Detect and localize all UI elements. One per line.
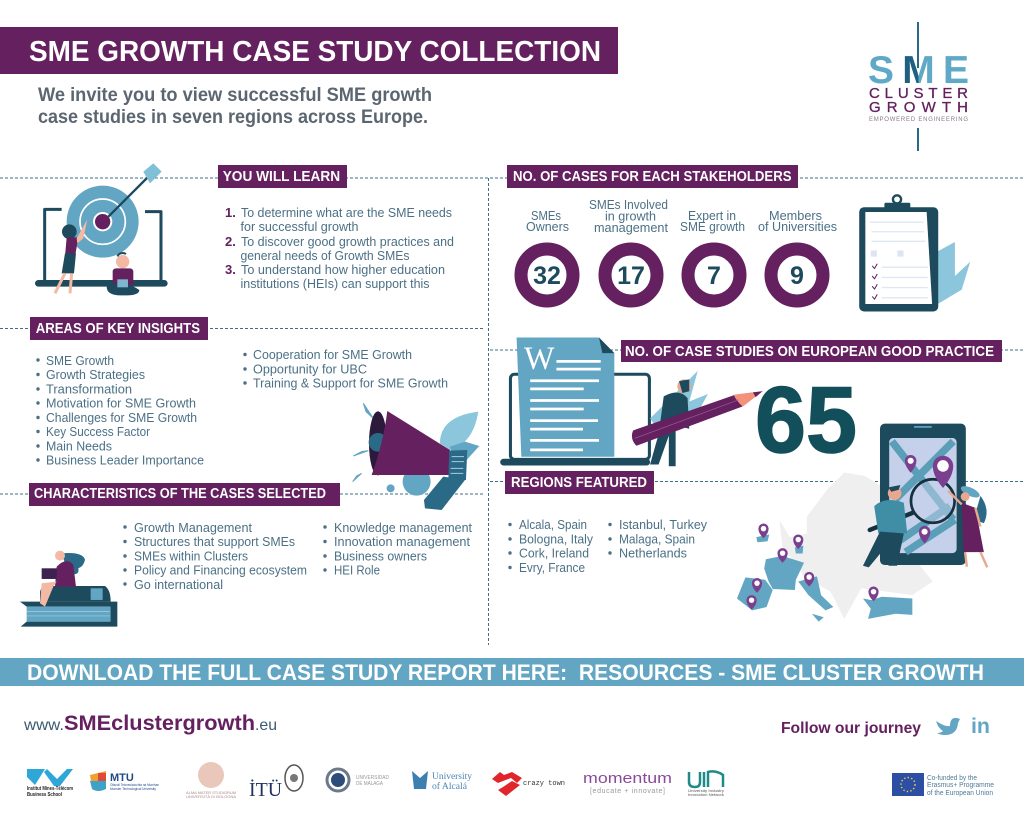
list: key insights column one: Transformation bbox=[46, 382, 132, 396]
logo: momentum bbox=[583, 770, 672, 795]
logo: MTU: MTU bbox=[110, 772, 134, 784]
subtitle bbox=[38, 85, 432, 128]
learning list: To discover good growth practices and bbox=[241, 234, 454, 249]
stakeholder labels: SMEs Involved bbox=[589, 197, 668, 212]
logo: University of Alcala bbox=[412, 771, 472, 792]
list: key insights column one: Business Leader Importance bbox=[46, 452, 204, 468]
stakeholder labels: of Universities bbox=[758, 219, 837, 234]
logo: Universidad de Malaga: UNIVERSIDAD bbox=[356, 775, 389, 781]
logo: ITU bbox=[249, 765, 303, 801]
stakeholder labels: SME growth bbox=[680, 219, 745, 234]
stakeholder labels: Expert in bbox=[688, 208, 736, 223]
learning list: institutions (HEIs) can support this bbox=[240, 276, 430, 291]
stakeholder number circles: 32 bbox=[533, 262, 561, 290]
logo: UIIN: Innovation Network bbox=[688, 793, 724, 797]
logo: SME Cluster Growth: SME bbox=[868, 49, 969, 92]
stakeholder labels bbox=[526, 197, 837, 235]
list: key insights column two: Opportunity for UBC bbox=[253, 362, 367, 376]
list: key insights column two bbox=[243, 347, 448, 390]
logo: SME Cluster Growth: EMPOWERED ENGINEERING bbox=[869, 117, 968, 123]
download banner: DOWNLOAD THE FULL CASE STUDY REPORT HERE: RESOURCES - SME CLUSTER GROWTH bbox=[27, 660, 984, 685]
list: case characteristics column one: Policy and Financing ecosystem bbox=[134, 562, 307, 578]
heading: areas of key insights: AREAS OF KEY INSIGHTS bbox=[36, 321, 200, 337]
website address: SMEclustergrowth bbox=[64, 712, 255, 735]
list: regions column two: Netherlands bbox=[619, 546, 687, 560]
icon: linkedin: in bbox=[971, 715, 990, 738]
logo: Universidad de Malaga bbox=[327, 769, 389, 791]
list: case characteristics column one: Growth Management bbox=[134, 520, 252, 535]
logo: SME Cluster Growth: GROWTH bbox=[869, 99, 968, 116]
list: key insights column one: Key Success Factor bbox=[46, 424, 151, 439]
illustration: tablet with magnifier and two people bbox=[863, 424, 987, 567]
logo: Institut Mines-Télécom Business School bbox=[27, 769, 73, 798]
logo: University of Alcala: of Alcalá bbox=[432, 781, 468, 792]
illustration: clipboard bbox=[859, 195, 970, 311]
heading: you will learn: YOU WILL LEARN bbox=[223, 169, 340, 185]
stakeholder labels: Owners bbox=[526, 219, 569, 234]
list: key insights column one: Growth Strategies bbox=[46, 367, 145, 382]
logo: University of Bologna: UNIVERSITÀ DI BOLOGNA bbox=[186, 794, 236, 799]
learning list: general needs of Growth SMEs bbox=[240, 248, 410, 263]
logo: momentum: [educate + innovate] bbox=[590, 788, 665, 795]
illustration: target and laptop bbox=[35, 163, 168, 295]
logo: crazy town: crazy town bbox=[523, 780, 565, 788]
title banner: SME GROWTH CASE STUDY COLLECTION bbox=[29, 36, 601, 68]
list: key insights column one bbox=[36, 353, 204, 468]
stakeholder labels: Members bbox=[769, 208, 822, 223]
list: regions column two bbox=[608, 517, 707, 560]
heading: regions featured: REGIONS FEATURED bbox=[511, 475, 647, 491]
list: regions column one: Alcala, Spain bbox=[519, 517, 587, 532]
logo: Erasmus+ co-funding statement: Co-funded by the bbox=[927, 775, 977, 782]
learning list: for successful growth bbox=[240, 219, 358, 234]
list: case characteristics column two: Business owners bbox=[334, 548, 427, 564]
heading: no. of cases for each stakeholders: NO. OF CASES FOR EACH STAKEHOLDERS bbox=[513, 169, 792, 185]
heading: you will learn bbox=[218, 165, 347, 188]
heading: no. of cases for each stakeholders bbox=[507, 165, 798, 188]
illustration: map of Europe with pins bbox=[737, 472, 933, 622]
big number 65: 65 bbox=[755, 367, 857, 472]
learning list: To understand how higher education bbox=[241, 262, 445, 277]
logo: University of Alcala: University bbox=[432, 772, 472, 782]
list: key insights column two: Training & Support for SME Growth bbox=[253, 376, 448, 390]
learning list bbox=[225, 205, 454, 291]
logo: UIIN bbox=[688, 771, 724, 797]
stakeholder labels: management bbox=[594, 220, 668, 235]
list: regions column one: Bologna, Italy bbox=[519, 532, 593, 546]
learning list: To determine what are the SME needs bbox=[241, 205, 452, 220]
title banner bbox=[0, 27, 618, 74]
learning list: 3. bbox=[225, 262, 236, 277]
website address: .eu bbox=[255, 717, 277, 734]
logo: Universidad de Malaga: DE MÁLAGA bbox=[356, 780, 384, 787]
logo: Erasmus+ co-funding statement: Erasmus+ Programme bbox=[927, 782, 994, 789]
stakeholder number circles: 7 bbox=[707, 262, 721, 290]
list: case characteristics column two: Innovation management bbox=[334, 534, 470, 549]
learning list: 1. bbox=[225, 205, 236, 220]
website address: www. bbox=[23, 717, 64, 734]
learning list: 2. bbox=[225, 234, 236, 249]
list: case characteristics column one: SMEs within Clusters bbox=[134, 548, 248, 564]
illustration: woman reading on books bbox=[20, 551, 117, 627]
stakeholder number circles: 9 bbox=[790, 262, 804, 290]
list: case characteristics column two: HEI Role bbox=[334, 562, 380, 578]
logo: Erasmus+ co-funding statement bbox=[892, 773, 994, 797]
stakeholder labels: in growth bbox=[605, 208, 656, 224]
stakeholder number circles bbox=[521, 249, 823, 301]
logo: University of Bologna: ALMA MATER STUDIORUM bbox=[186, 790, 236, 795]
list: regions column one: Cork, Ireland bbox=[519, 546, 589, 560]
heading: characteristics of the cases selected: CHARACTERISTICS OF THE CASES SELECTED bbox=[34, 486, 326, 502]
follow our journey: Follow our journey bbox=[781, 720, 921, 737]
stakeholder labels: SMEs bbox=[531, 208, 561, 223]
subtitle: We invite you to view successful SME growth bbox=[38, 85, 432, 106]
list: case characteristics column one: Go international bbox=[134, 577, 223, 592]
illustration: document on laptop with pencil man bbox=[500, 337, 762, 466]
logo: MTU: Munster Technological University bbox=[110, 787, 156, 791]
logo: SME Cluster Growth bbox=[868, 22, 969, 151]
list: key insights column two: Cooperation for SME Growth bbox=[253, 347, 412, 362]
list: case characteristics column one: Structures that support SMEs bbox=[134, 534, 295, 549]
illustration: document on laptop with pencil man: W bbox=[524, 340, 555, 376]
stakeholder number circles: 17 bbox=[617, 262, 645, 290]
logo: Erasmus+ co-funding statement: of the European Union bbox=[927, 790, 993, 797]
heading: no. of case studies on european good practice: NO. OF CASE STUDIES ON EUROPEAN GOOD PRACTICE bbox=[625, 344, 994, 360]
heading: characteristics of the cases selected bbox=[29, 483, 340, 506]
list: case characteristics column two: Knowledge management bbox=[334, 520, 472, 535]
logo: Institut Mines-Télécom Business School: Institut Mines-Télécom bbox=[27, 786, 73, 792]
list: key insights column one: Challenges for SME Growth bbox=[46, 410, 197, 425]
logo: SME Cluster Growth: CLUSTER bbox=[869, 85, 968, 102]
illustration: megaphone bbox=[353, 403, 479, 510]
heading: areas of key insights bbox=[30, 317, 208, 340]
heading: no. of case studies on european good practice bbox=[621, 340, 1002, 362]
logo: MTU: Ollscoil Teicneolaíochta na Mumhan bbox=[110, 783, 159, 787]
list: key insights column one: SME Growth bbox=[46, 353, 114, 368]
heading: regions featured bbox=[505, 471, 654, 494]
logo: Institut Mines-Télécom Business School: Business School bbox=[27, 792, 63, 798]
logo: University of Bologna bbox=[186, 762, 236, 799]
logo: ITU: İTÜ bbox=[249, 778, 283, 801]
list: case characteristics column one bbox=[123, 520, 307, 592]
list: regions column two: Malaga, Spain bbox=[619, 532, 695, 546]
subtitle: case studies in seven regions across Europe. bbox=[38, 107, 428, 128]
list: key insights column one: Motivation for SME Growth bbox=[46, 396, 196, 410]
list: regions column two: Istanbul, Turkey bbox=[619, 517, 707, 532]
list: regions column one bbox=[508, 517, 593, 575]
logo: UIIN: University Industry bbox=[688, 789, 724, 793]
icon: twitter bbox=[936, 718, 960, 735]
list: case characteristics column two bbox=[323, 520, 472, 578]
list: regions column one: Evry, France bbox=[519, 560, 585, 575]
logo: crazy town bbox=[492, 772, 565, 796]
logo: momentum: momentum bbox=[583, 770, 672, 787]
list: key insights column one: Main Needs bbox=[46, 438, 112, 454]
logo: MTU bbox=[90, 771, 159, 791]
